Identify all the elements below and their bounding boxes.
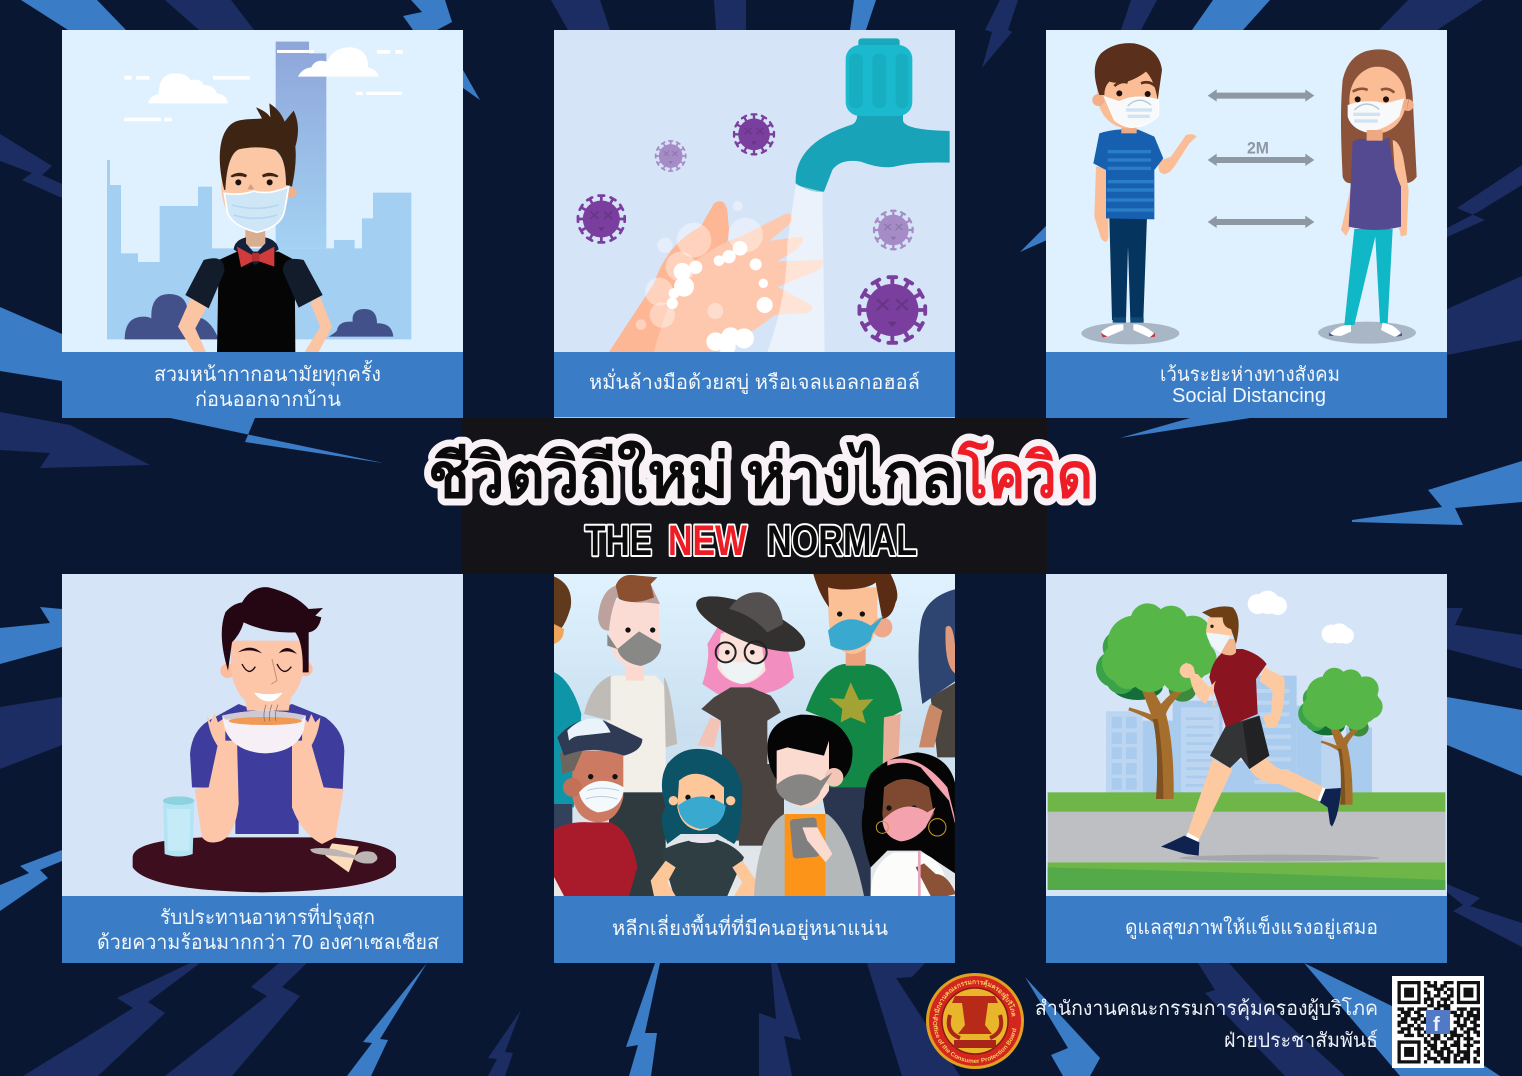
caption bar bbox=[554, 352, 955, 418]
caption bar bbox=[554, 896, 955, 963]
icon: large tree bbox=[1096, 603, 1217, 799]
caption bar: Social Distancing bbox=[1172, 385, 1326, 407]
caption bar bbox=[1046, 896, 1447, 963]
jogger bbox=[1161, 606, 1341, 856]
title: Thai headline: โควิด bbox=[957, 439, 1093, 511]
illustration: crowd in masks bbox=[551, 574, 956, 899]
caption bar: หลีกเลี่ยงพื้นที่ที่มีคนอยู่หนาแน่น bbox=[612, 914, 888, 941]
girl bbox=[1318, 49, 1417, 344]
illustration: hands and foam bbox=[609, 185, 825, 355]
subtitle: NEW bbox=[668, 517, 747, 565]
panel: eat cooked food bbox=[62, 574, 464, 963]
panel: wash hands bbox=[554, 30, 956, 418]
back man in grey mask bbox=[584, 575, 677, 899]
illustration: man in mask with city bbox=[62, 30, 464, 353]
illustration: hands under faucet with viruses bbox=[554, 30, 956, 355]
green shirt man bbox=[806, 574, 902, 896]
footer: organisation name: ฝ่ายประชาสัมพันธ์ bbox=[1224, 1029, 1378, 1052]
caption bar: ดูแลสุขภาพให้แข็งแรงอยู่เสมอ bbox=[1125, 914, 1378, 940]
teal hair girl bbox=[651, 749, 757, 896]
caption bar: รับประทานอาหารที่ปรุงสุก bbox=[160, 903, 375, 930]
icon: consumer protection board seal: สำนักงานคณะกรรมการคุ้มครองผู้บริโภค bbox=[932, 980, 1016, 1020]
icon: consumer protection board seal bbox=[926, 973, 1024, 1069]
arrows: two metres: 2M bbox=[1247, 139, 1269, 158]
subtitle bbox=[585, 517, 917, 565]
pink hair woman with hat bbox=[696, 592, 806, 846]
caption bar bbox=[1046, 352, 1447, 418]
subtitle: THE bbox=[585, 517, 652, 565]
icon: consumer protection board seal: Office of the Consumer Protection Board bbox=[933, 1021, 1016, 1063]
icon: small tree bbox=[1298, 668, 1383, 805]
back left teal person bbox=[554, 576, 582, 830]
illustration: boy and girl two metres apart bbox=[1046, 30, 1448, 353]
subtitle: NORMAL bbox=[767, 517, 917, 565]
woman with headband bbox=[862, 752, 956, 896]
icon: faucet bbox=[796, 38, 950, 192]
footer: organisation name: สำนักงานคณะกรรมการคุ้มครองผู้บริโภค bbox=[1035, 997, 1378, 1021]
caption bar: สวมหน้ากากอนามัยทุกครั้ง bbox=[154, 360, 381, 387]
icon: viruses bbox=[578, 114, 925, 343]
panel: wear a mask bbox=[62, 30, 464, 418]
caption bar bbox=[62, 352, 463, 418]
city buildings bbox=[1106, 676, 1372, 793]
icon: glass of water bbox=[163, 796, 194, 856]
icon: QR code with Facebook badge bbox=[1392, 976, 1484, 1068]
title band bbox=[428, 418, 1093, 574]
illustration: jogger in park bbox=[1046, 574, 1448, 897]
caption bar: ด้วยความร้อนมากกว่า 70 องศาเซลเซียส bbox=[97, 932, 439, 954]
panel: social distancing bbox=[1046, 30, 1448, 418]
icon: QR code with Facebook badge: f bbox=[1433, 1014, 1440, 1036]
boy bbox=[1081, 43, 1197, 344]
title: Thai headline: ชีวิตวิถีใหม่ ห่างไกล bbox=[428, 440, 958, 511]
caption bar: หมั่นล้างมือด้วยสบู่ หรือเจลแอลกอฮอล์ bbox=[589, 368, 920, 395]
icon: napkin and spoon bbox=[310, 843, 377, 872]
illustration: man smelling hot soup bbox=[62, 574, 464, 897]
grey-mask person with phone bbox=[754, 715, 864, 896]
caption bar bbox=[62, 896, 463, 963]
panel: exercise bbox=[1046, 574, 1448, 963]
caption bar: เว้นระยะห่างทางสังคม bbox=[1160, 364, 1340, 386]
right edge woman bbox=[919, 589, 956, 757]
icon: clouds bbox=[1248, 591, 1354, 644]
arrows: two metres bbox=[1208, 89, 1314, 228]
cap boy bbox=[551, 718, 642, 896]
footer: organisation name bbox=[1035, 997, 1378, 1052]
caption bar: ก่อนออกจากบ้าน bbox=[195, 389, 341, 411]
panel: avoid crowds bbox=[551, 574, 956, 963]
